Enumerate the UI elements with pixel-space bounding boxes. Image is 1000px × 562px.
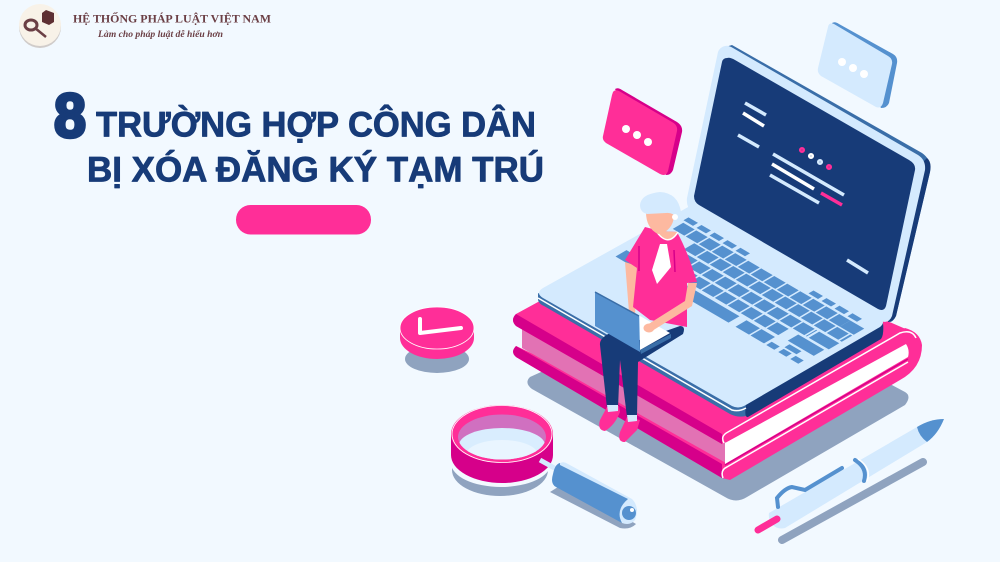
screen edge <box>722 45 930 322</box>
laptop <box>538 45 931 417</box>
pink pill <box>236 205 371 234</box>
collar and tie <box>656 231 678 240</box>
screen panel <box>694 58 915 310</box>
screen bezel <box>687 46 925 322</box>
pen <box>758 419 944 540</box>
base top <box>539 206 883 408</box>
person <box>595 192 697 442</box>
site name: HỆ THỐNG PHÁP LUẬT VIỆT NAM <box>73 10 271 26</box>
title: BỊ XÓA ĐĂNG KÝ TẠM TRÚ <box>87 150 544 190</box>
keyboard <box>618 217 870 364</box>
hand <box>644 324 654 332</box>
check button <box>400 307 474 373</box>
logo <box>19 4 61 48</box>
pages right <box>725 344 909 464</box>
book shadow <box>527 300 908 500</box>
light chat bubble <box>818 22 897 108</box>
left arm <box>625 262 637 316</box>
screen content <box>738 103 868 273</box>
lower cover <box>514 328 922 480</box>
pages left <box>522 328 726 463</box>
hinge line <box>692 211 880 320</box>
title <box>54 82 544 190</box>
right arm <box>647 283 697 331</box>
title: TRƯỜNG HỢP CÔNG DÂN <box>96 104 536 144</box>
top cover <box>513 290 910 444</box>
small laptop <box>640 316 670 350</box>
legs <box>600 326 684 417</box>
magnifier <box>451 405 637 528</box>
shoes <box>599 406 620 431</box>
book <box>513 290 922 480</box>
pink chat bubble <box>603 88 682 175</box>
head <box>646 212 674 234</box>
base side <box>538 293 883 417</box>
tagline: Làm cho pháp luật dễ hiểu hơn <box>97 29 223 39</box>
title: 8 <box>54 82 86 151</box>
shirt <box>625 227 697 327</box>
